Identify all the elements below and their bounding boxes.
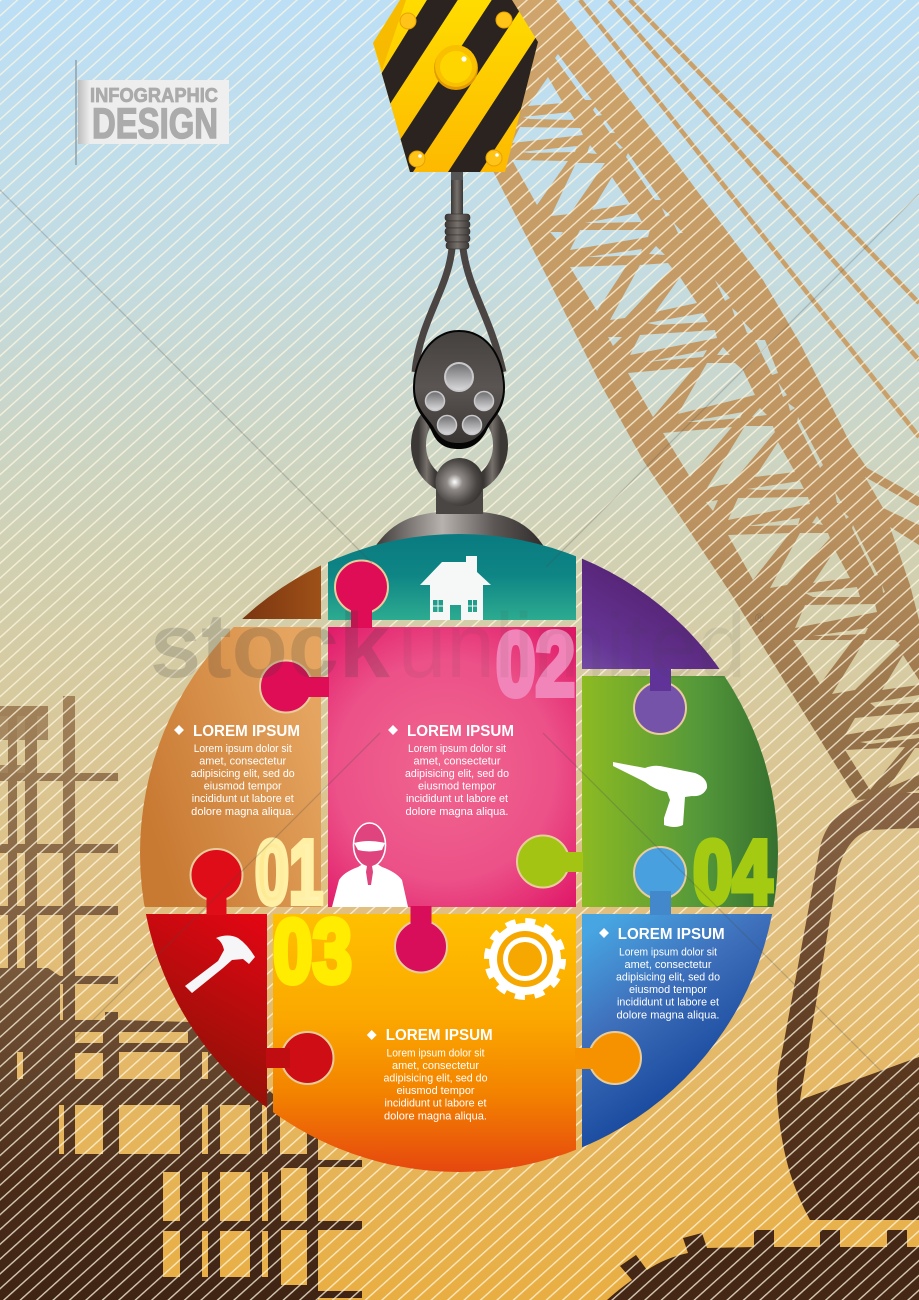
hook block bbox=[373, 0, 538, 180]
text block 04: dolore magna aliqua. bbox=[616, 1010, 720, 1022]
text block 03 bbox=[367, 1027, 493, 1122]
text block 04: eiusmod tempor bbox=[629, 984, 707, 996]
text block 02: Lorem ipsum dolor sit bbox=[408, 743, 506, 755]
text block 01: dolore magna aliqua. bbox=[191, 806, 294, 818]
icon: bolts bbox=[400, 12, 512, 167]
tabs: puzzle connectors bbox=[190, 560, 686, 1084]
pulley bbox=[413, 330, 505, 449]
text block 02 bbox=[388, 723, 514, 818]
rope bbox=[415, 172, 503, 372]
text block 02: eiusmod tempor bbox=[418, 780, 496, 792]
panel: pink piece 02 bbox=[328, 627, 576, 907]
text block 03: amet, consectetur bbox=[392, 1060, 479, 1072]
panel: teal piece bbox=[328, 530, 576, 620]
panel: blue piece bbox=[582, 914, 772, 1148]
text block 04: incididunt ut labore et bbox=[617, 996, 719, 1008]
number 03: 03 bbox=[273, 902, 352, 1002]
logo tag: infographic design: DESIGN bbox=[92, 100, 218, 148]
text block 01: incididunt ut labore et bbox=[192, 793, 294, 805]
icon: drill bbox=[613, 762, 707, 827]
watermark: unlimited bbox=[398, 595, 746, 697]
icon: house bbox=[420, 556, 491, 620]
text block 03: dolore magna aliqua. bbox=[384, 1110, 487, 1122]
puzzle ball bbox=[135, 530, 782, 1174]
watermark: ® bbox=[755, 611, 764, 625]
text block 04: LOREM IPSUM bbox=[618, 926, 725, 943]
text block 01: amet, consectetur bbox=[199, 756, 287, 768]
ball knob and dome bbox=[373, 458, 546, 550]
logo tag: infographic design bbox=[75, 60, 229, 165]
text block 04 bbox=[599, 926, 725, 1022]
text block 03: adipisicing elit, sed do bbox=[384, 1072, 488, 1084]
text block 03: LOREM IPSUM bbox=[386, 1027, 493, 1044]
panel: purple piece bbox=[582, 558, 720, 669]
text block 01: adipisicing elit, sed do bbox=[191, 768, 295, 780]
panel: green piece 04 bbox=[582, 676, 782, 907]
text block 01: LOREM IPSUM bbox=[193, 723, 300, 740]
icon: hammer bbox=[185, 936, 255, 993]
number 02: 02 bbox=[496, 615, 575, 715]
panel: brown piece bbox=[242, 566, 321, 619]
icon: worker bbox=[332, 823, 408, 907]
text block 04: amet, consectetur bbox=[624, 959, 712, 971]
text block 03: eiusmod tempor bbox=[396, 1085, 475, 1097]
text block 02: dolore magna aliqua. bbox=[406, 806, 508, 818]
shackle ring bbox=[418, 402, 500, 488]
number 01: 01 bbox=[255, 823, 323, 923]
text block 02: adipisicing elit, sed do bbox=[405, 768, 509, 780]
excavator silhouette bbox=[777, 793, 919, 1220]
number 04: 04 bbox=[693, 823, 772, 923]
text block 02: LOREM IPSUM bbox=[407, 723, 514, 740]
text block 01: Lorem ipsum dolor sit bbox=[194, 743, 292, 755]
logo tag: infographic design: INFOGRAPHIC bbox=[90, 85, 218, 107]
text block 01: eiusmod tempor bbox=[204, 780, 282, 792]
crane boom lattice bbox=[480, 0, 919, 800]
watermark bbox=[0, 190, 919, 1113]
text block 04: Lorem ipsum dolor sit bbox=[619, 946, 717, 958]
text block 01 bbox=[174, 723, 300, 818]
text block 02: amet, consectetur bbox=[414, 756, 501, 768]
text block 03: Lorem ipsum dolor sit bbox=[386, 1048, 484, 1060]
gear silhouette bbox=[607, 1230, 919, 1300]
crane cables bbox=[580, 0, 919, 437]
scaffold silhouette bbox=[0, 696, 362, 1300]
panel: orange piece 01 bbox=[135, 627, 321, 907]
panel: red piece bbox=[146, 914, 267, 1108]
text block 02: incididunt ut labore et bbox=[406, 793, 508, 805]
watermark: stock bbox=[150, 595, 391, 697]
panel: yellow piece 03 bbox=[273, 914, 576, 1174]
text block 04: adipisicing elit, sed do bbox=[616, 972, 720, 984]
icon: gear bbox=[488, 922, 562, 996]
text block 03: incididunt ut labore et bbox=[384, 1098, 486, 1110]
